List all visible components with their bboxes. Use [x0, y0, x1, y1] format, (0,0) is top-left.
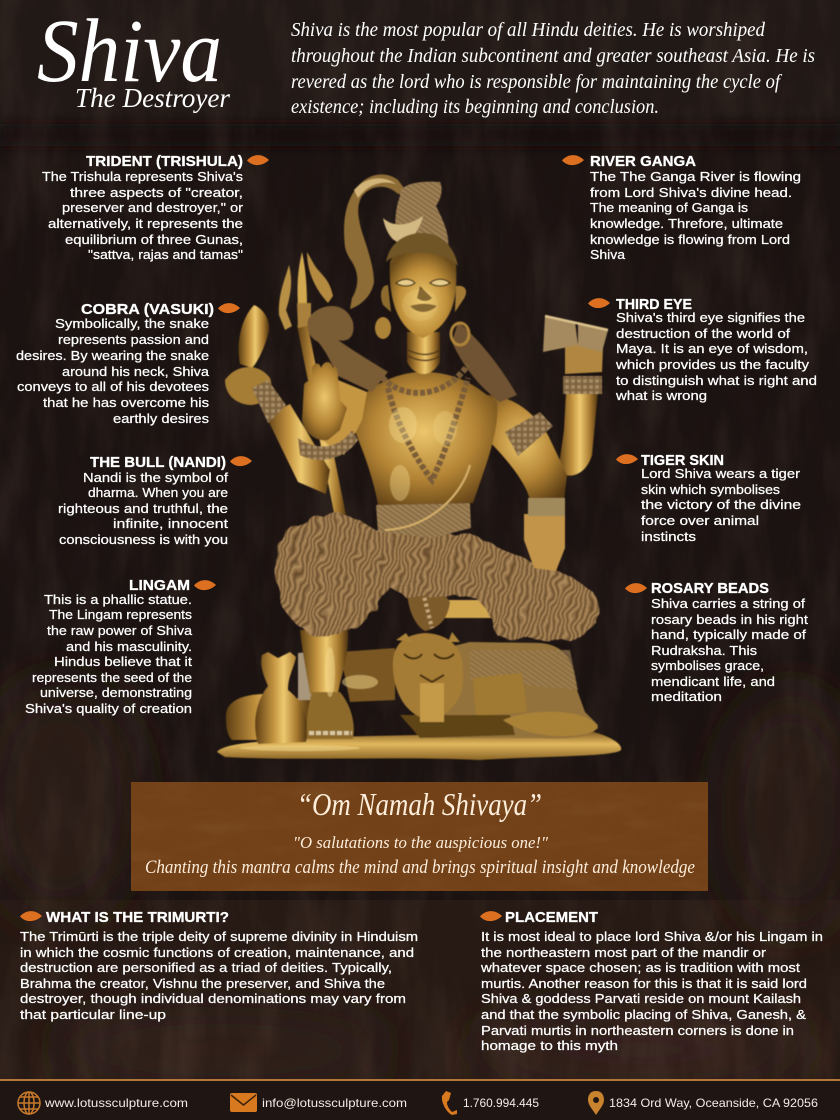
- description: Lord Shiva wears a tiger: [641, 466, 801, 481]
- trident: [279, 252, 347, 523]
- subtitle: The Destroyer: The Destroyer: [75, 83, 230, 113]
- description: Shiva's quality of creation: [25, 701, 192, 716]
- foot: [307, 692, 354, 739]
- icon: envelope: [230, 1093, 257, 1112]
- description: [651, 596, 808, 704]
- description: conveys to all of his devotees: [17, 379, 210, 394]
- description: rosary beads in his right: [651, 612, 808, 627]
- outer left forearm: [266, 404, 330, 494]
- face and head: [375, 233, 469, 345]
- serpent cobra: [307, 306, 388, 392]
- neck: [407, 332, 440, 374]
- section: Placement: [480, 910, 823, 1053]
- description: knowledge is flowing from Lord: [590, 232, 790, 247]
- description: [25, 592, 193, 716]
- icon: globe: [18, 1092, 40, 1114]
- description: in which the cosmic functions of creation, maintenance, and: [20, 945, 414, 960]
- description: homage to this myth: [481, 1038, 618, 1053]
- heading: TIGER SKIN: [641, 453, 724, 469]
- base: [217, 731, 621, 760]
- description: Brahma the creator, Vishnu the preserver, and Shiva the: [20, 976, 385, 991]
- icon: map pin: [588, 1091, 604, 1115]
- description: [480, 929, 823, 1053]
- section: What is the Trimurti: [20, 910, 418, 1022]
- hair bun: [395, 182, 448, 250]
- description: This is a phallic statue.: [44, 592, 192, 607]
- callout: Lingam: [25, 578, 216, 716]
- description: that he has overcome his: [43, 395, 210, 410]
- description: murtis. Another reason for this is that it is said lord: [481, 976, 807, 991]
- description: from Lord Shiva's divine head.: [590, 185, 792, 200]
- intro text block: [291, 19, 815, 118]
- icon: orange leaf: [588, 298, 610, 308]
- description: consciousness is with you: [59, 532, 228, 547]
- description: meditation: [651, 689, 722, 704]
- description: [16, 316, 210, 426]
- waist belt: [376, 503, 471, 538]
- description: whatever space chosen; as is tradition with most: [480, 960, 800, 975]
- description: skin which symbolises: [641, 482, 781, 497]
- description: which provides us the faculty: [615, 357, 810, 372]
- description: that particular line-up: [20, 1007, 166, 1022]
- description: [590, 169, 801, 262]
- heading: PLACEMENT: [505, 910, 598, 926]
- intro text block: revered as the lord who is responsible for maintaining the cycle of: [291, 71, 783, 93]
- outer right forearm: [558, 392, 598, 476]
- callout: River Ganga: [562, 154, 801, 262]
- rudraksha bead necklaces: [378, 365, 468, 480]
- description: desires. By wearing the snake: [16, 348, 209, 363]
- lower right arm to knee: [478, 395, 567, 500]
- icon: orange leaf: [625, 583, 647, 593]
- description: the raw power of Shiva: [47, 623, 193, 638]
- description: righteous and truthful, the: [58, 501, 228, 516]
- description: three aspects of "creator,: [70, 185, 243, 200]
- callout: Trident: [42, 154, 269, 262]
- description: to distinguish what is right and: [616, 373, 817, 388]
- icon: orange leaf: [218, 303, 240, 313]
- callout: Tiger Skin: [616, 453, 801, 544]
- description: Maya. It is an eye of wisdom,: [616, 341, 808, 356]
- standing shin: [300, 630, 348, 694]
- icon: orange leaf: [480, 911, 502, 921]
- intro text block: existence; including its beginning and conclusion.: [291, 96, 659, 118]
- description: The Trimūrti is the triple deity of supreme divinity in Hinduism: [20, 929, 418, 944]
- crescent moon: [383, 216, 423, 242]
- callout: Cobra: [16, 302, 240, 426]
- address: 1834 Ord Way, Oceanside, CA 92056: [609, 1096, 818, 1110]
- callout: The Bull: [58, 455, 252, 547]
- tiger skin lap: [275, 515, 598, 640]
- back of bent thigh: [340, 648, 395, 702]
- heading: RIVER GANGA: [590, 154, 697, 170]
- description: The Lingam represents: [49, 607, 193, 622]
- description: The Trishula represents Shiva's: [42, 169, 244, 184]
- description: universe, demonstrating: [40, 685, 192, 700]
- description: The The Ganga River is flowing: [590, 169, 801, 184]
- description: Parvati murtis in northeastern corners is done in: [481, 1023, 794, 1038]
- icon: orange leaf: [194, 580, 216, 590]
- body of bull: [226, 694, 312, 740]
- description: represents passion and: [58, 332, 209, 347]
- heading: THE BULL (NANDI): [90, 455, 226, 471]
- foot toes: [309, 731, 352, 735]
- description: alternatively, it represents the: [48, 216, 243, 231]
- description: [20, 929, 418, 1022]
- heading: COBRA (VASUKI): [81, 302, 214, 318]
- description: symbolises grace,: [651, 658, 764, 673]
- description: equilibrium of three Gunas,: [65, 232, 243, 247]
- heading: TRIDENT (TRISHULA): [86, 154, 243, 170]
- icon: orange leaf: [230, 456, 252, 466]
- callout: Rosary Beads: [625, 581, 808, 704]
- bull Nandi: [255, 652, 307, 744]
- description: [641, 466, 801, 544]
- damaru and holding hand: [543, 316, 608, 394]
- heading: LINGAM: [129, 578, 190, 594]
- sacred thread sash: [385, 465, 470, 530]
- description: destruction are personified as a triad of deities. Typically,: [20, 960, 392, 975]
- description: earthly desires: [113, 411, 210, 426]
- icon: orange leaf: [616, 454, 638, 464]
- website: www.lotussculpture.com: [44, 1096, 188, 1110]
- callout: Third Eye: [588, 297, 817, 403]
- mantra title: “Om Namah Shivaya”: [297, 786, 542, 822]
- tiger vehicle: [393, 632, 598, 739]
- description: represents the seed of the: [32, 670, 192, 685]
- description: and his masculinity.: [66, 639, 192, 654]
- description: mendicant life, and: [651, 674, 775, 689]
- description: [58, 470, 228, 547]
- heading: ROSARY BEADS: [651, 581, 769, 597]
- icon: phone: [442, 1091, 457, 1115]
- panel: mantra: [131, 782, 708, 891]
- phone number: 1.760.994.445: [463, 1096, 539, 1110]
- mantra translation: "O salutations to the auspicious one!": [293, 833, 549, 852]
- description: Rudraksha. This: [651, 643, 758, 658]
- description: knowledge. Threfore, ultimate: [590, 216, 783, 231]
- icon: orange leaf: [20, 911, 42, 921]
- heading: THIRD EYE: [616, 297, 692, 313]
- raised hand (abhaya) and wrist: [298, 362, 367, 460]
- icon: orange leaf: [247, 155, 269, 165]
- description: Shiva carries a string of: [651, 596, 805, 611]
- description: [42, 169, 244, 262]
- statue: bronze Shiva: [217, 174, 621, 760]
- description: preserver and destroyer," or: [62, 200, 244, 215]
- description: instincts: [641, 529, 697, 544]
- icon: orange leaf: [562, 155, 584, 165]
- heading: WHAT IS THE TRIMURTI?: [46, 910, 229, 926]
- description: [615, 310, 817, 403]
- description: the northeastern most part of the mandir or: [481, 945, 767, 960]
- description: infinite, innocent: [113, 516, 228, 531]
- description: Shiva & goddess Parvati reside on mount Kailash: [481, 991, 801, 1006]
- mantra note: Chanting this mantra calms the mind and brings spiritual insight and knowledge: [145, 857, 695, 878]
- description: It is most ideal to place lord Shiva &/or his Lingam in: [481, 929, 823, 944]
- description: The meaning of Ganga is: [590, 200, 749, 215]
- description: Nandi is the symbol of: [83, 470, 228, 485]
- neck lines: [408, 350, 440, 360]
- description: Shiva: [590, 247, 626, 262]
- description: Symbolically, the snake: [55, 316, 209, 331]
- description: the victory of the divine: [641, 497, 801, 512]
- conch and holding hand: [225, 305, 286, 423]
- description: Shiva's third eye signifies the: [616, 310, 805, 325]
- email: info@lotussculpture.com: [262, 1096, 407, 1110]
- footer bar: [0, 1079, 840, 1120]
- description: hand, typically made of: [651, 627, 806, 642]
- description: "sattva, rajas and tamas": [88, 247, 243, 262]
- description: destroyer, though individual denominations may vary from: [20, 991, 406, 1006]
- intro text block: Shiva is the most popular of all Hindu deities. He is worshiped: [291, 19, 766, 41]
- title: Shiva: Shiva: [37, 2, 222, 101]
- description: dharma. When you are: [88, 485, 228, 500]
- description: around his neck, Shiva: [62, 364, 210, 379]
- description: what is wrong: [615, 388, 707, 403]
- chest highlights: [240, 289, 457, 751]
- horizontal shin and folded foot: [407, 589, 495, 631]
- hair lock right: [452, 322, 517, 402]
- description: force over animal: [641, 513, 759, 528]
- description: and that the symbolic placing of Shiva, Ganesh, &: [481, 1007, 806, 1022]
- description: Hindus believe that it: [54, 654, 192, 669]
- torso: [350, 372, 497, 505]
- description: destruction of the world of: [616, 326, 790, 341]
- river Ganga hair stream: [344, 174, 407, 309]
